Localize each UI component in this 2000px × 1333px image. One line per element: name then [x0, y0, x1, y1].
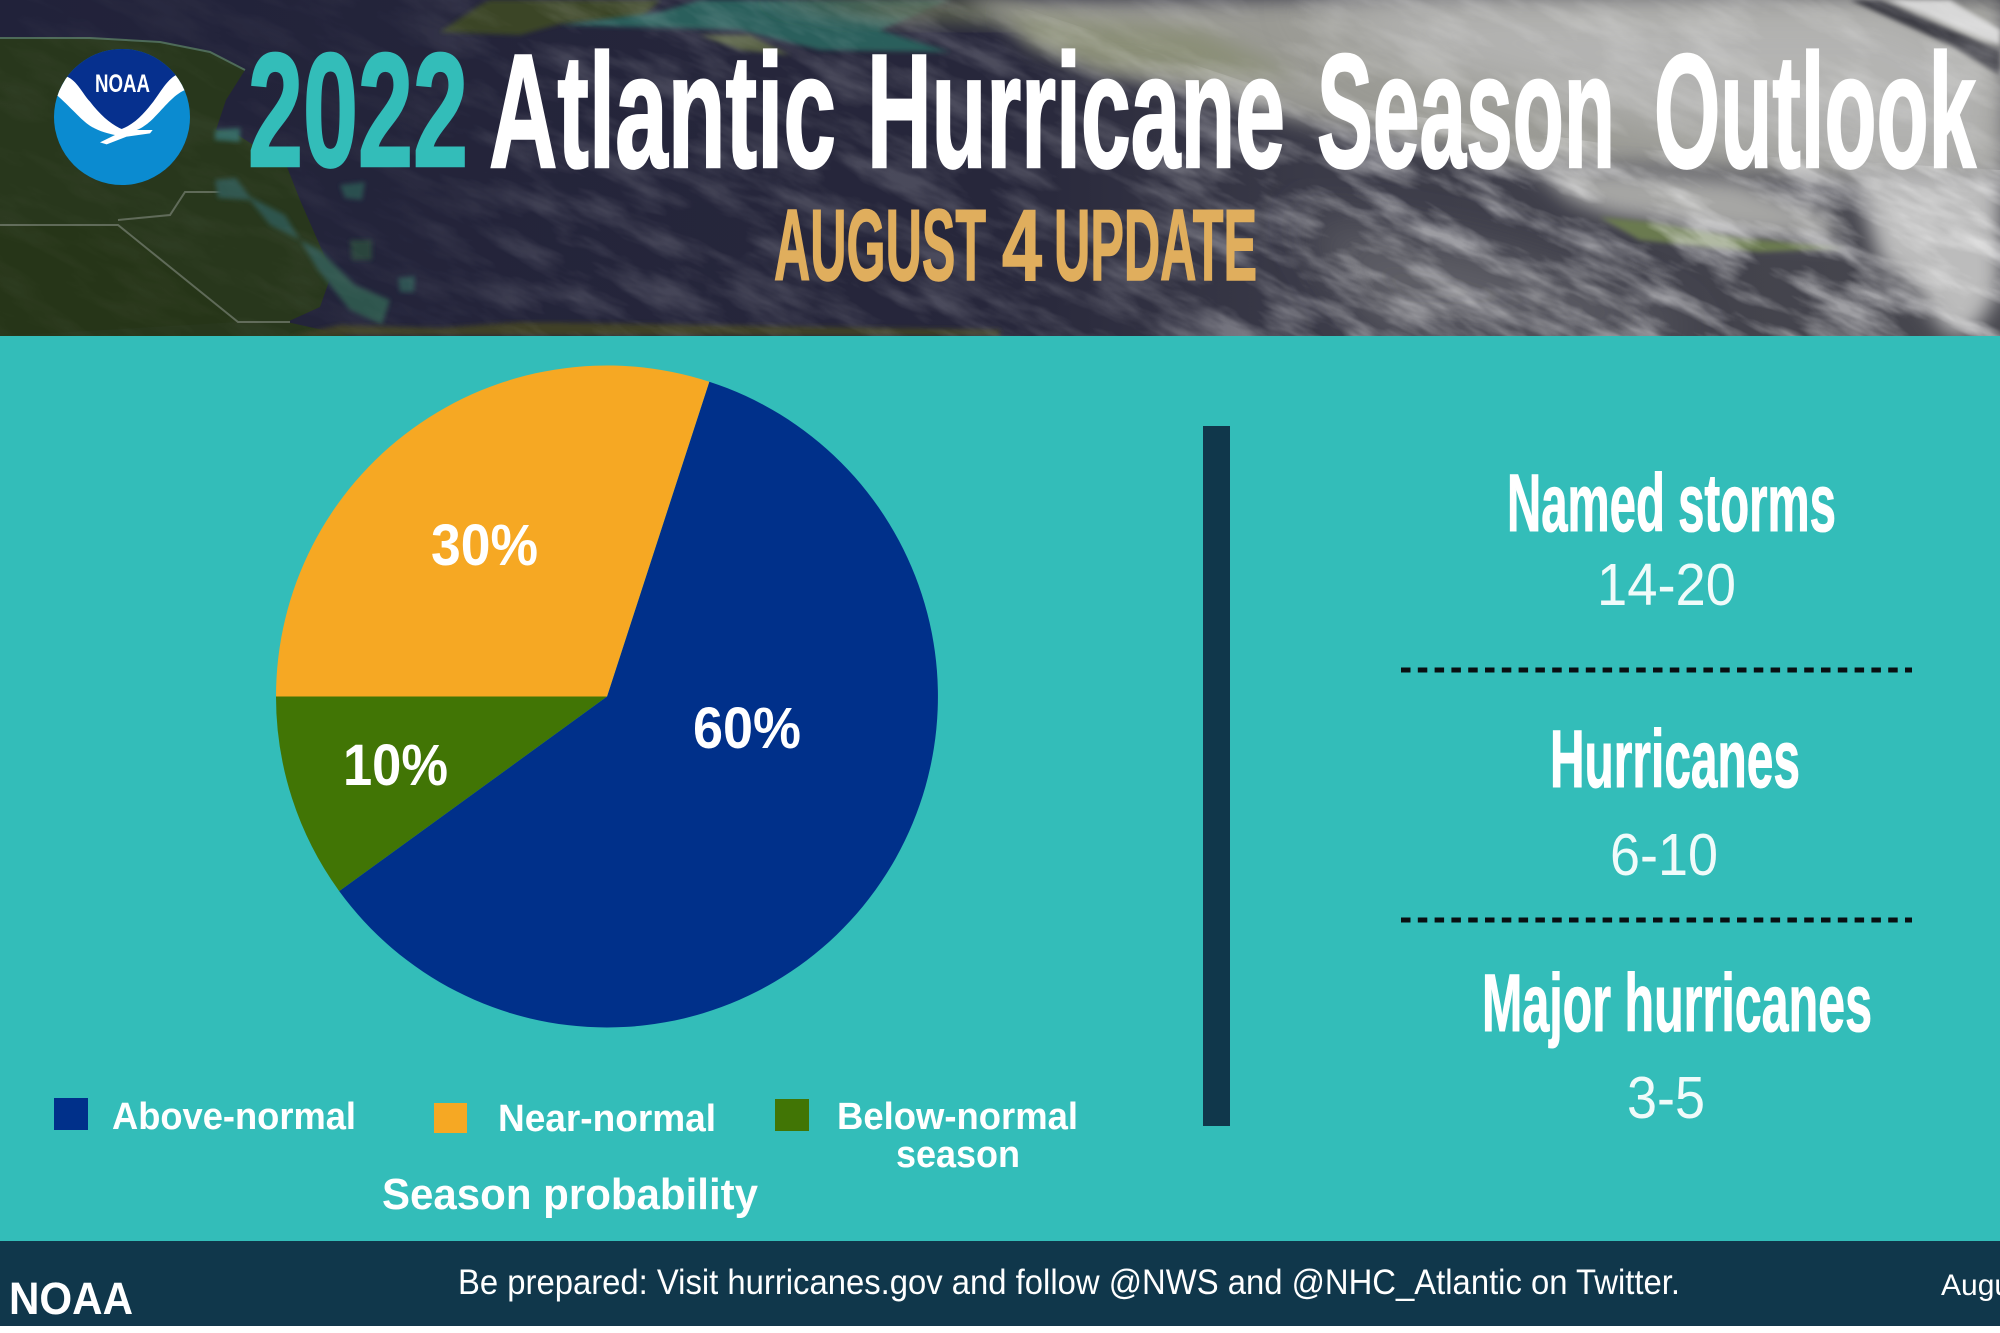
pie chart: season probability — [276, 365, 938, 1027]
label: 10%: 10% — [343, 733, 448, 798]
dashed divider two — [1401, 918, 1912, 922]
title: Season — [1317, 21, 1615, 202]
title — [248, 20, 1976, 202]
slice: above-normal 60% — [339, 382, 938, 1027]
subtitle: AUGUST — [774, 190, 986, 302]
stat heading: hurricanes: Hurricanes — [1550, 714, 1800, 805]
dashed divider one — [1401, 668, 1912, 672]
label: 30%: 30% — [431, 513, 538, 578]
footer: call to action: Be prepared: Visit hurricanes.gov and follow @NWS and @NHC_Atlantic on Twitter. — [458, 1263, 1680, 1302]
page background: teal panel — [0, 336, 2000, 1241]
legend swatch: above-normal — [54, 1098, 88, 1130]
title: Atlantic — [489, 21, 836, 202]
stat value: 6-10: 6-10 — [1610, 822, 1718, 888]
footer bar — [0, 1241, 2000, 1326]
legend label: below-normal season: Below-normal — [837, 1096, 1078, 1138]
icon: NOAA logo: NOAA — [95, 70, 150, 98]
label: 60%: 60% — [693, 696, 801, 761]
slice: below-normal 10% — [276, 696, 607, 891]
header satellite image background — [0, 0, 2000, 336]
forecast stats — [1401, 458, 1912, 1131]
legend label: below-normal season — [837, 1096, 1078, 1176]
footer: NOAA wordmark: NOAA — [9, 1273, 133, 1324]
legend label: above-normal: Above-normal — [112, 1096, 356, 1138]
vertical divider bar — [1203, 426, 1230, 1126]
title: 2022 — [248, 20, 468, 201]
slice: near-normal 30% — [276, 365, 709, 696]
icon: NOAA logo — [54, 49, 190, 185]
text: UPDATE — [1054, 190, 1257, 302]
chart caption: season probability: Season probability — [382, 1170, 759, 1219]
stat value: 14-20: 14-20 — [1597, 552, 1736, 618]
legend label: near-normal: Near-normal — [498, 1098, 716, 1140]
title: Hurricane — [867, 21, 1285, 202]
legend — [54, 1096, 1078, 1176]
legend swatch: below-normal — [775, 1099, 809, 1131]
legend label: below-normal season: season — [896, 1134, 1020, 1176]
stat value: 3-5: 3-5 — [1627, 1065, 1705, 1131]
subtitle: 4 — [1002, 190, 1042, 302]
legend swatch: near-normal — [434, 1103, 467, 1133]
